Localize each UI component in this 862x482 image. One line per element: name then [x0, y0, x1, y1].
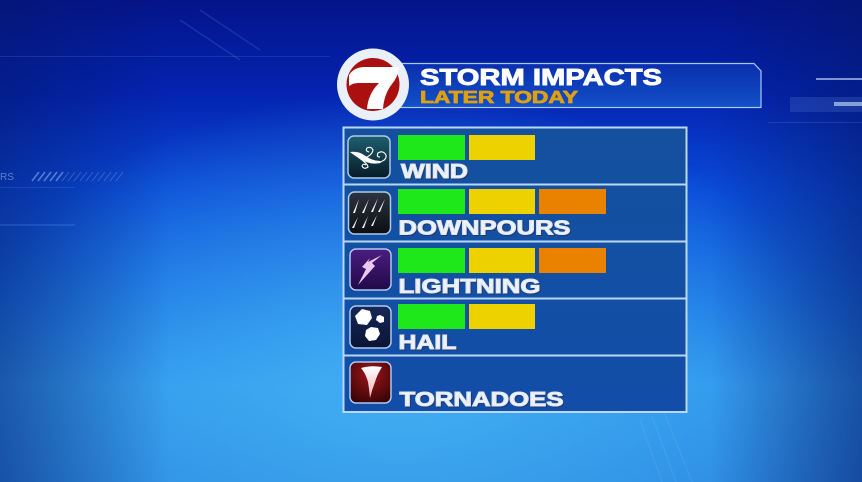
row: hail [350, 304, 535, 354]
background fragment: text and hatch marks [0, 172, 123, 183]
row: downpours [348, 189, 606, 240]
label: tornadoes: TORNADOES [400, 389, 564, 411]
storm impacts panel [343, 128, 687, 412]
icon: wind [348, 136, 390, 178]
impact bars: wind [398, 135, 535, 160]
background fragment: text and hatch marks: RS [0, 172, 14, 183]
label: wind: WIND [401, 161, 468, 183]
impact bars: lightning [398, 248, 606, 273]
label: hail: HAIL [398, 332, 456, 354]
row: lightning [350, 248, 606, 298]
label: downpours: DOWNPOURS [398, 218, 570, 240]
row: wind [348, 135, 535, 183]
icon: lightning [350, 249, 391, 290]
subtitle: later today: LATER TODAY [420, 87, 578, 107]
icon: downpours [348, 192, 390, 234]
title banner [400, 64, 761, 108]
logo: channel 7 [337, 48, 409, 120]
icon: hail [350, 306, 391, 348]
title: storm impacts: STORM IMPACTS [420, 64, 662, 90]
impact bars: downpours [398, 189, 606, 214]
row: tornadoes [350, 362, 564, 411]
label: lightning: LIGHTNING [398, 276, 540, 298]
impact bars: hail [398, 304, 535, 329]
icon: tornado [350, 362, 391, 403]
